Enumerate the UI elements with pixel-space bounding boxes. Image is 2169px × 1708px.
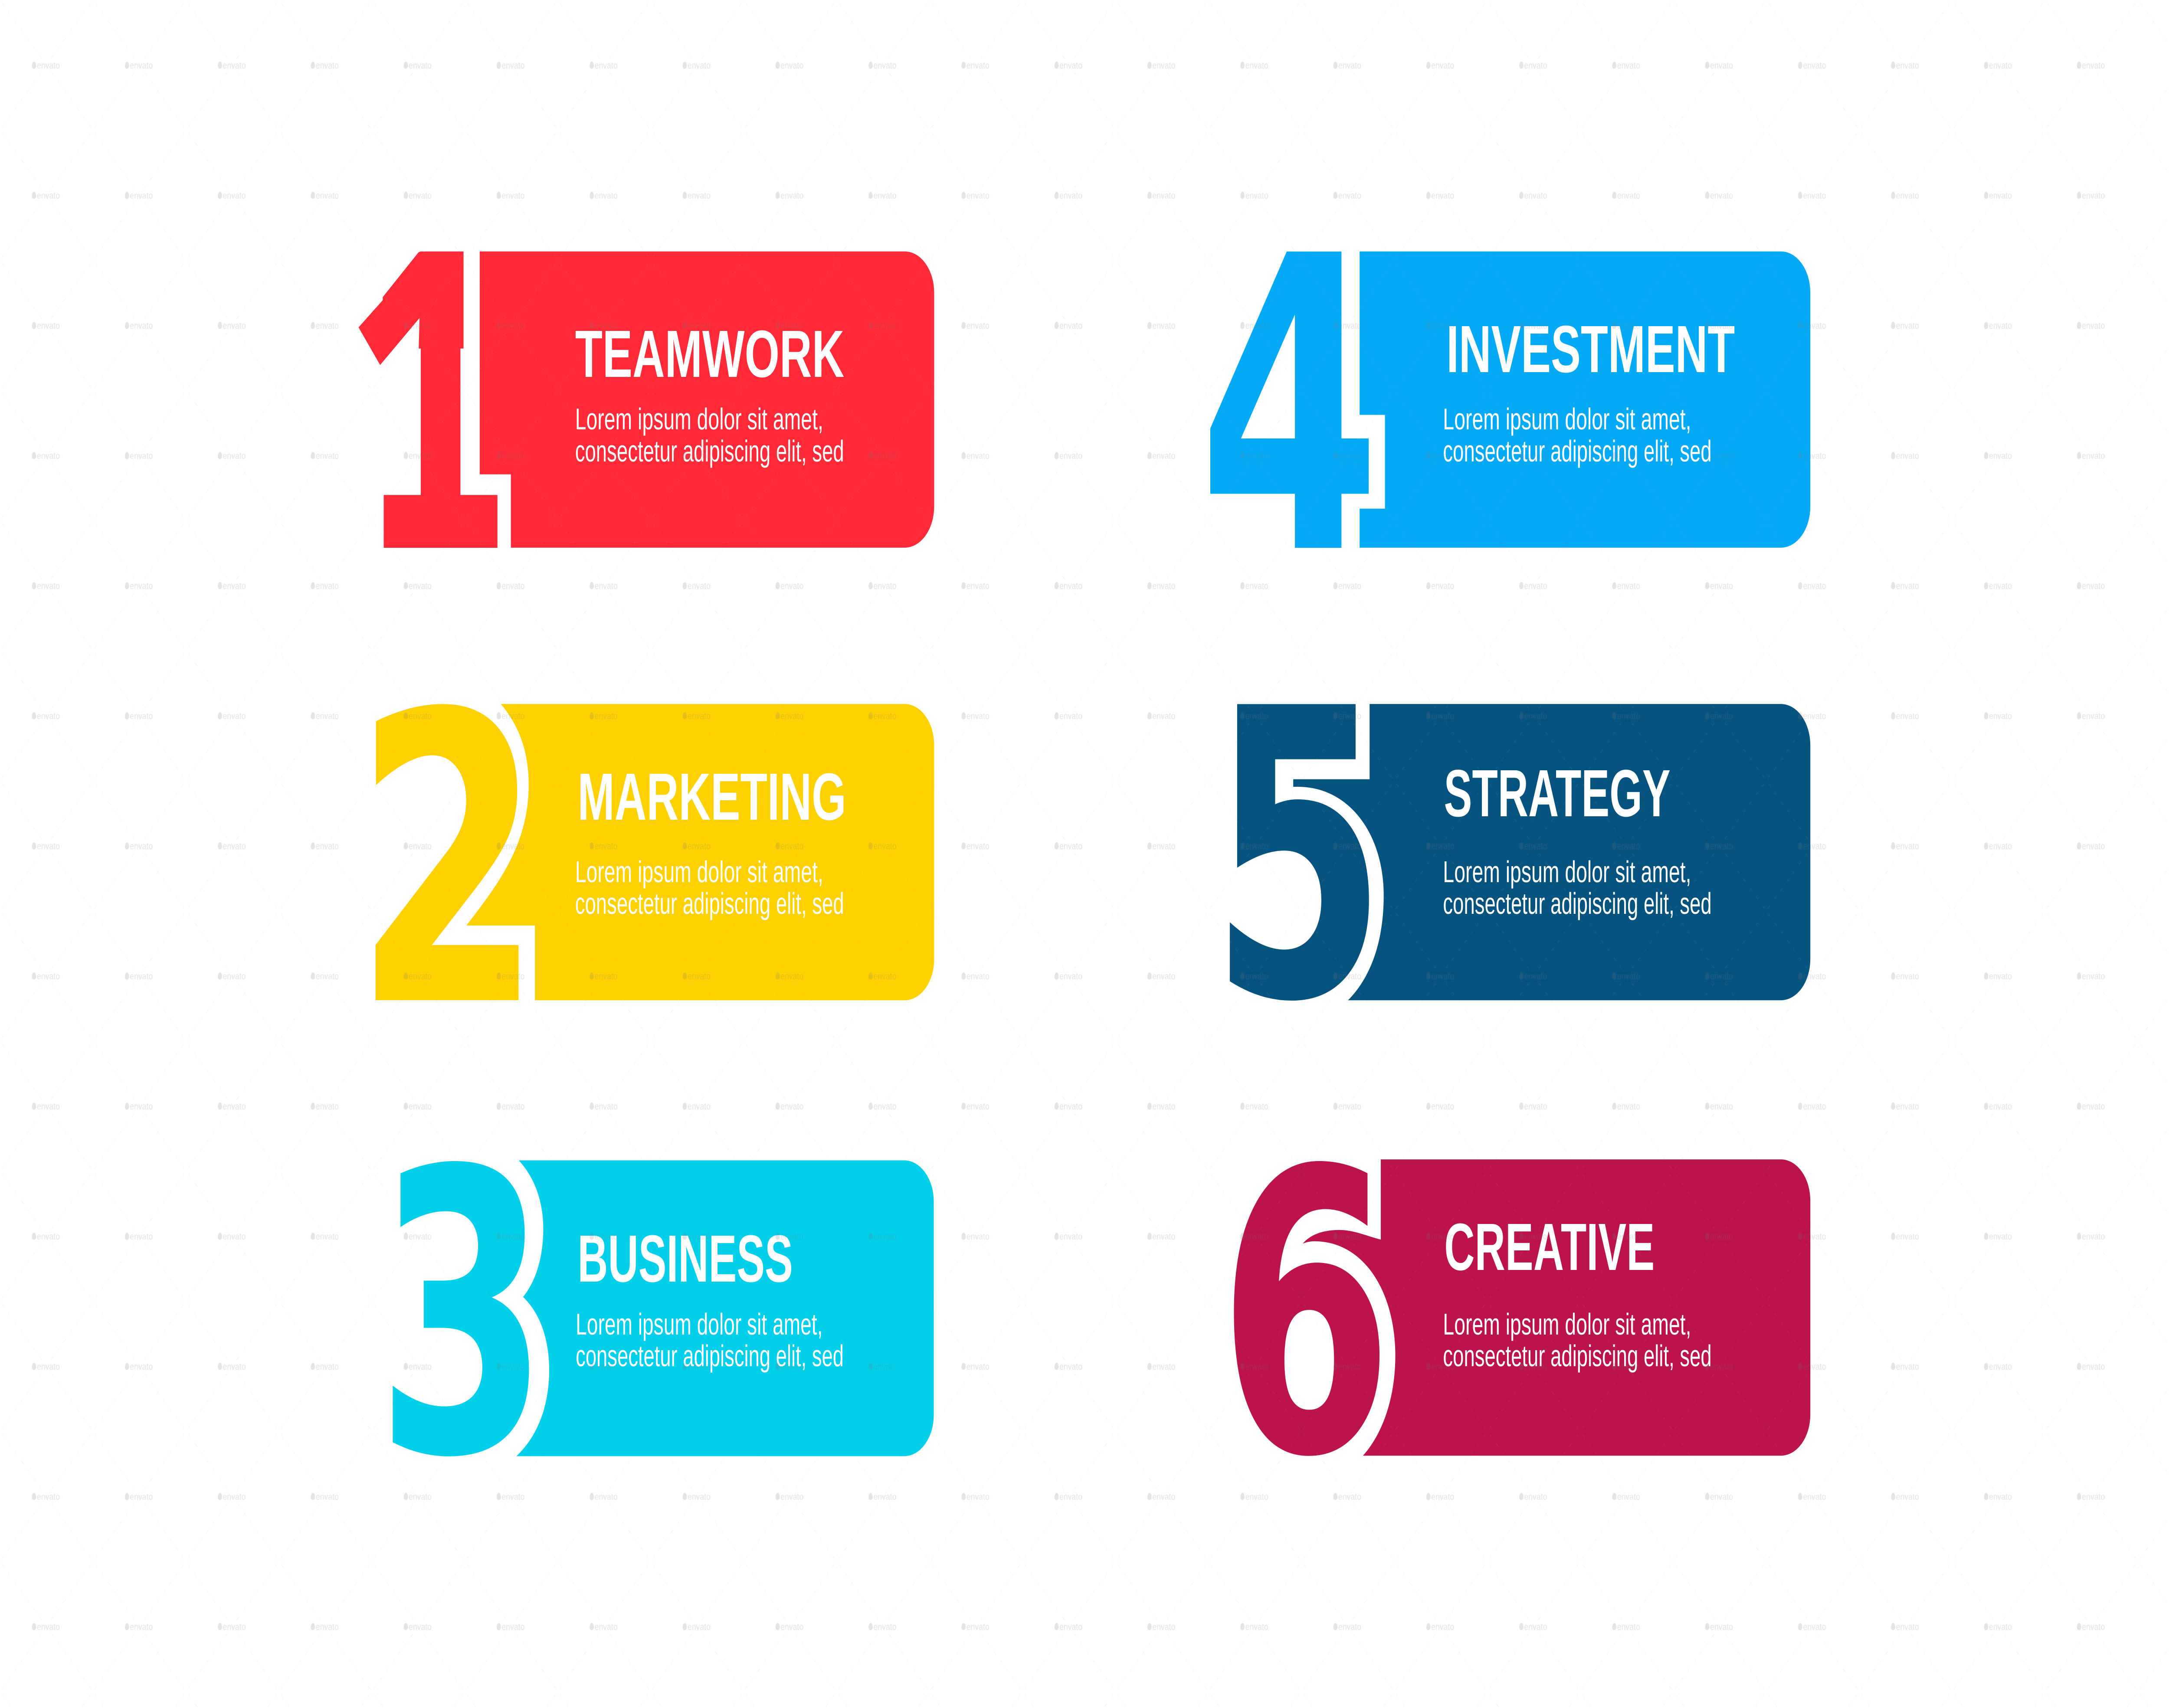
panel 1: teamwork [353, 171, 934, 644]
heading: investment: INVESTMENT [1446, 312, 1735, 386]
numeral 5: 5 [1210, 625, 1387, 1089]
body text: Lorem ipsum dolor sit amet, [1443, 402, 1691, 436]
panel 2 background [466, 704, 934, 1000]
panel 4: investment [1199, 170, 1810, 644]
panel 6 background [1303, 1159, 1810, 1456]
numeral 1 flag accent [359, 252, 464, 365]
heading: marketing: MARKETING [577, 760, 846, 834]
body text: consectetur adipiscing elit, sed [576, 1339, 844, 1373]
panel 2: marketing [354, 630, 934, 1095]
heading: strategy: STRATEGY [1444, 756, 1671, 831]
body text: consectetur adipiscing elit, sed [1443, 1339, 1712, 1373]
body text: consectetur adipiscing elit, sed [575, 887, 844, 920]
panel 4 background [1360, 252, 1810, 548]
numeral 4: 4 [1199, 170, 1381, 644]
panel 3: business [376, 1088, 934, 1543]
numeral 6: 6 [1219, 1089, 1393, 1543]
numeral 3: 3 [376, 1088, 549, 1543]
numeral 2: 2 [354, 630, 542, 1095]
heading: creative: CREATIVE [1444, 1210, 1655, 1284]
body text: Lorem ipsum dolor sit amet, [575, 402, 823, 436]
numeral 1 flag mask [353, 243, 426, 327]
body text: Lorem ipsum dolor sit amet, [1443, 1307, 1691, 1341]
heading: teamwork: TEAMWORK [575, 317, 844, 391]
panel 1 background [480, 252, 934, 548]
body text: Lorem ipsum dolor sit amet, [576, 1307, 822, 1341]
heading: business: BUSINESS [577, 1222, 793, 1296]
body text: Lorem ipsum dolor sit amet, [575, 855, 823, 889]
body text: Lorem ipsum dolor sit amet, [1443, 855, 1691, 889]
panel 5 background [1293, 704, 1810, 1000]
body text: consectetur adipiscing elit, sed [575, 434, 844, 468]
body text: consectetur adipiscing elit, sed [1443, 434, 1712, 468]
numeral 1: 1 [357, 171, 513, 644]
panel 6: creative [1219, 1089, 1810, 1543]
body text: consectetur adipiscing elit, sed [1443, 887, 1712, 920]
panel 5: strategy [1210, 625, 1810, 1089]
panel 3 background [516, 1160, 934, 1456]
